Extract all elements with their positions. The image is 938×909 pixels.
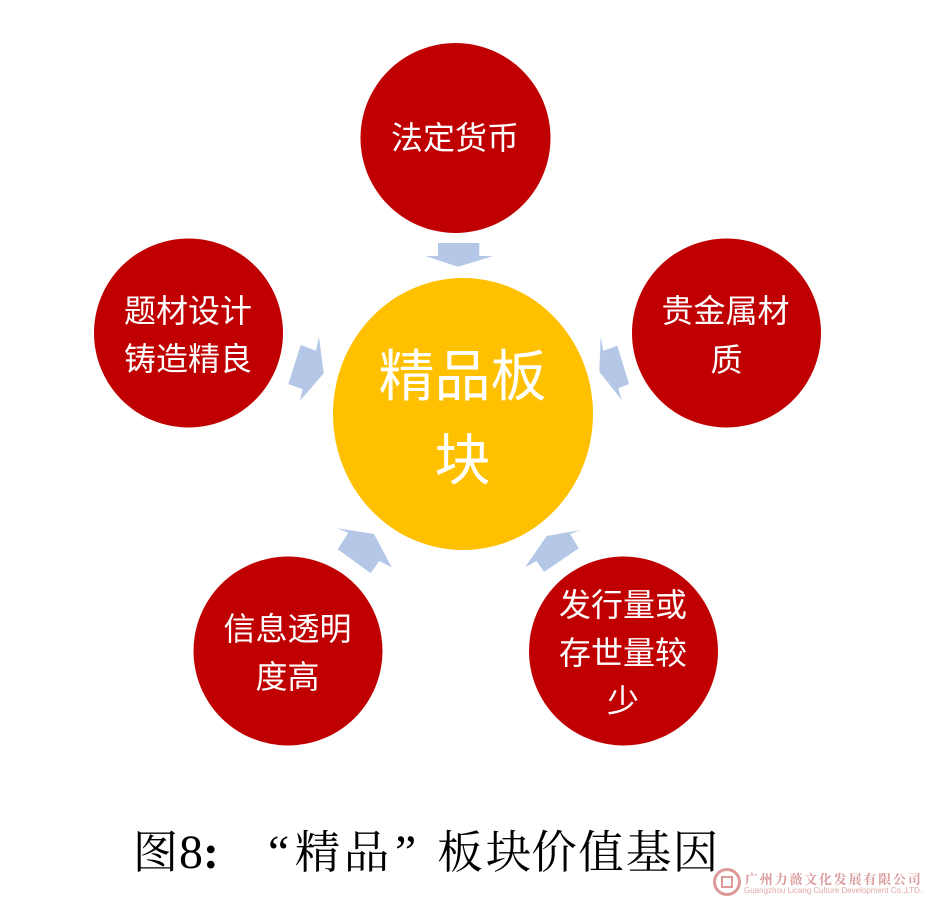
company name: 广州力薇文化发展有限公司 bbox=[745, 872, 923, 887]
node: information transparency: 信息透明 bbox=[223, 611, 352, 647]
arrow: top bbox=[425, 243, 493, 267]
node: low issuance or survival count bbox=[529, 556, 718, 746]
arrow: bottom left bbox=[337, 528, 392, 573]
title: 基 bbox=[626, 827, 671, 878]
center node: premium sector: 块 bbox=[434, 429, 490, 492]
title: : bbox=[203, 826, 219, 879]
title: 精 bbox=[295, 827, 340, 878]
arrow: bottom right bbox=[525, 530, 581, 572]
node: legal currency: 法定货币 bbox=[391, 120, 519, 156]
node: precious metal material bbox=[632, 238, 821, 428]
company name in English: Guangzhou Licang Culture Development Co.,LTD. bbox=[744, 886, 922, 895]
center node: premium sector bbox=[333, 278, 593, 550]
node: legal currency bbox=[360, 43, 550, 233]
title: ” bbox=[395, 826, 416, 879]
title: 块 bbox=[486, 827, 531, 878]
company logo watermark bbox=[714, 870, 923, 895]
node: theme design and casting: 铸造精良 bbox=[124, 341, 252, 377]
arrow: left bbox=[288, 337, 324, 401]
node: low issuance or survival count: 发行量或 bbox=[559, 587, 687, 623]
title: 板 bbox=[437, 827, 483, 878]
node: low issuance or survival count: 少 bbox=[607, 683, 639, 719]
title: 值 bbox=[578, 827, 624, 878]
node: information transparency bbox=[194, 556, 382, 746]
arrow: right bbox=[599, 337, 629, 400]
title: 品 bbox=[344, 827, 389, 878]
node: theme design and casting bbox=[94, 238, 283, 428]
title: 价 bbox=[531, 827, 577, 878]
title bbox=[133, 826, 718, 879]
center node: premium sector: 精品板 bbox=[378, 345, 546, 408]
node: precious metal material: 质 bbox=[710, 342, 743, 378]
node: theme design and casting: 题材设计 bbox=[124, 293, 252, 329]
node: precious metal material: 贵金属材 bbox=[661, 293, 790, 329]
node: low issuance or survival count: 存世量较 bbox=[559, 635, 687, 671]
title: 因 bbox=[673, 827, 718, 878]
icon: coin bbox=[714, 870, 740, 894]
title: 8 bbox=[179, 826, 203, 879]
title: 图 bbox=[133, 827, 178, 878]
title: “ bbox=[268, 826, 289, 879]
node: information transparency: 度高 bbox=[255, 659, 320, 695]
